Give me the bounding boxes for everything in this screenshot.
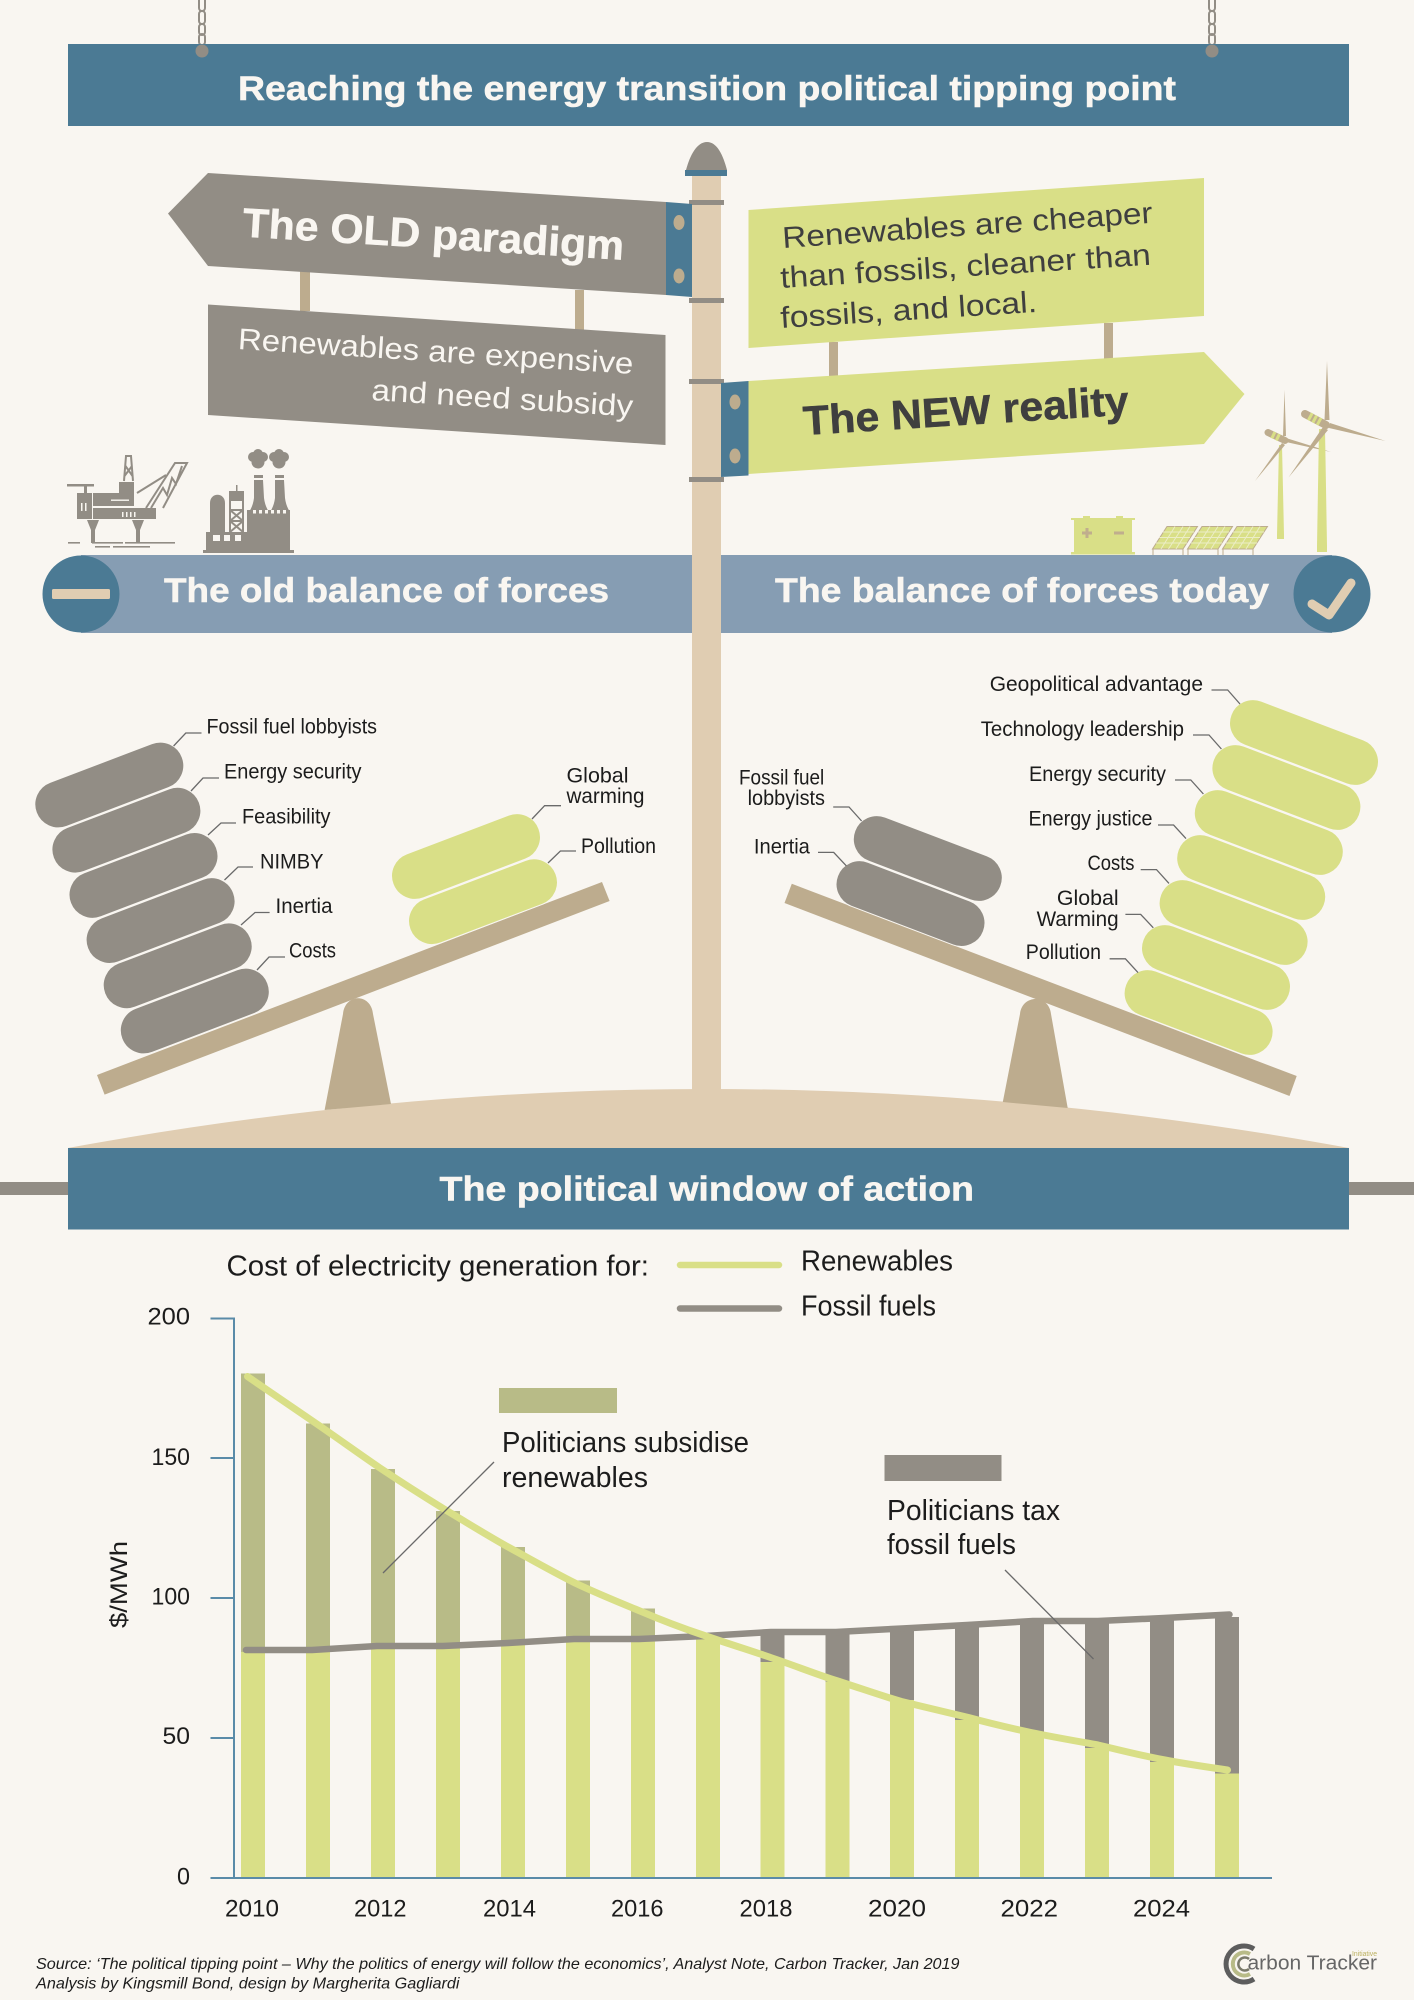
- callout: politicians tax fossil fuels: [884, 1455, 1094, 1659]
- y axis labels: [106, 1304, 190, 1890]
- x axis labels: [225, 1896, 1190, 1922]
- logo: Carbon Tracker: arbon Tracker: [1248, 1952, 1377, 1974]
- icon: oil rig: [67, 456, 187, 548]
- icon: wind turbines: [1255, 361, 1386, 552]
- labels: Energy security: [1029, 763, 1166, 786]
- callout: politicians subsidise renewables: renewables: [502, 1462, 648, 1494]
- icon: solar panels: [1152, 526, 1268, 555]
- heading: political window of action: The political window of action: [440, 1170, 974, 1208]
- y axis labels: 100: [152, 1584, 190, 1610]
- heading: old balance of forces: The old balance of forces: [164, 572, 609, 610]
- line: renewables: [248, 1376, 1228, 1770]
- fossil weights: [829, 809, 1009, 953]
- sign: new reality statement: [748, 178, 1204, 378]
- x axis labels: 2020: [868, 1896, 926, 1922]
- labels: Costs: [1088, 852, 1134, 875]
- x axis labels: 2022: [1000, 1896, 1058, 1922]
- source note: Analysis by Kingsmill Bond, design by Margherita Gagliardi: [35, 1976, 460, 1992]
- bar chart: [106, 1304, 1272, 1922]
- labels: Energy security: [224, 760, 362, 784]
- x axis labels: 2014: [483, 1896, 536, 1922]
- renewable subsidy bars: [241, 1374, 655, 1654]
- heading: balance of forces today: The balance of forces today: [775, 572, 1269, 610]
- axes: [210, 1318, 1272, 1878]
- labels: Pollution: [581, 835, 656, 858]
- heading: old balance of forces: [42, 555, 692, 633]
- sign: old paradigm statement: [208, 304, 666, 445]
- labels: [739, 673, 1240, 973]
- base cost bars: [241, 1638, 1239, 1878]
- source note: Source: ‘The political tipping point – Why the politics of energy will follow the economics’, Analyst Note, Carbon Tracker, Jan 2019: [36, 1956, 960, 1973]
- labels: warming: [566, 785, 644, 808]
- y axis labels: 50: [162, 1723, 190, 1750]
- signpost: [685, 142, 727, 1100]
- x axis labels: 2024: [1133, 1896, 1190, 1922]
- x axis labels: 2012: [354, 1896, 406, 1922]
- callout: politicians subsidise renewables: Politicians subsidise: [502, 1427, 749, 1459]
- x axis labels: 2016: [611, 1896, 664, 1922]
- logo: Carbon Tracker: [1226, 1946, 1377, 1982]
- labels: [174, 716, 656, 970]
- sign: new reality statement: fossils, and local.: [779, 286, 1038, 335]
- callout: politicians tax fossil fuels: fossil fuels: [887, 1529, 1016, 1561]
- labels: Inertia: [754, 836, 810, 858]
- labels: Energy justice: [1028, 808, 1152, 830]
- line: fossil fuels: [246, 1614, 1230, 1650]
- chart legend: [226, 1246, 953, 1322]
- y axis labels: 200: [148, 1304, 190, 1330]
- fossil tax bars: [760, 1617, 1239, 1775]
- heading: political window of action: [0, 1148, 1414, 1230]
- ground mound: [68, 1089, 1349, 1148]
- title banner: Reaching the energy transition political tipping point: [238, 70, 1176, 108]
- chart legend: Renewables: [801, 1246, 953, 1278]
- labels: NIMBY: [260, 850, 324, 874]
- x axis labels: 2010: [225, 1896, 279, 1922]
- fossil weights: [28, 735, 276, 1061]
- chart legend: Cost of electricity generation for:: [226, 1250, 649, 1282]
- sign: new reality: The NEW reality: [802, 378, 1130, 444]
- source note: [35, 1956, 960, 1992]
- old balance scale: [28, 716, 656, 1110]
- sign: old paradigm statement: Renewables are expensive: [237, 323, 634, 381]
- scale fulcrum: [325, 998, 391, 1110]
- y axis labels: 0: [177, 1864, 190, 1890]
- labels: lobbyists: [748, 787, 825, 810]
- labels: Costs: [289, 940, 336, 962]
- scale fulcrum: [1003, 999, 1068, 1108]
- renewable weights: [385, 807, 564, 951]
- y axis labels: $/MWh: [106, 1541, 133, 1628]
- labels: Global: [1057, 887, 1119, 910]
- labels: Fossil fuel lobbyists: [206, 716, 377, 738]
- scale plank: [784, 884, 1297, 1096]
- labels: Warming: [1037, 908, 1119, 931]
- logo: Carbon Tracker: Initiative: [1352, 1951, 1377, 1958]
- icon: factory: [203, 449, 294, 553]
- sign: old paradigm: [168, 173, 692, 330]
- callout: politicians tax fossil fuels: Politicians tax: [887, 1495, 1060, 1527]
- labels: Global: [566, 764, 628, 788]
- hanging chains: [199, 0, 1215, 45]
- labels: Fossil fuel: [739, 766, 824, 790]
- labels: Feasibility: [242, 806, 331, 828]
- x axis labels: 2018: [740, 1896, 792, 1922]
- labels: Inertia: [276, 895, 333, 918]
- sign: old paradigm statement: and need subsidy: [371, 374, 634, 423]
- sign: new reality: [721, 352, 1244, 477]
- labels: Pollution: [1026, 941, 1101, 964]
- y axis labels: 150: [152, 1444, 190, 1471]
- callout: politicians subsidise renewables: [383, 1388, 749, 1573]
- sign: new reality statement: Renewables are cheaper: [781, 197, 1154, 255]
- renewable weights: [1117, 693, 1385, 1062]
- chart legend: Fossil fuels: [801, 1290, 936, 1322]
- title banner: [68, 44, 1349, 126]
- labels: Geopolitical advantage: [990, 673, 1203, 696]
- sign: old paradigm: The OLD paradigm: [241, 200, 626, 269]
- heading: balance of forces today: [721, 555, 1370, 633]
- icon: battery: [1071, 516, 1135, 554]
- scale plank: [97, 882, 610, 1095]
- today balance scale: [739, 673, 1385, 1108]
- labels: Technology leadership: [981, 718, 1184, 741]
- sign: new reality statement: than fossils, cleaner than: [779, 239, 1152, 295]
